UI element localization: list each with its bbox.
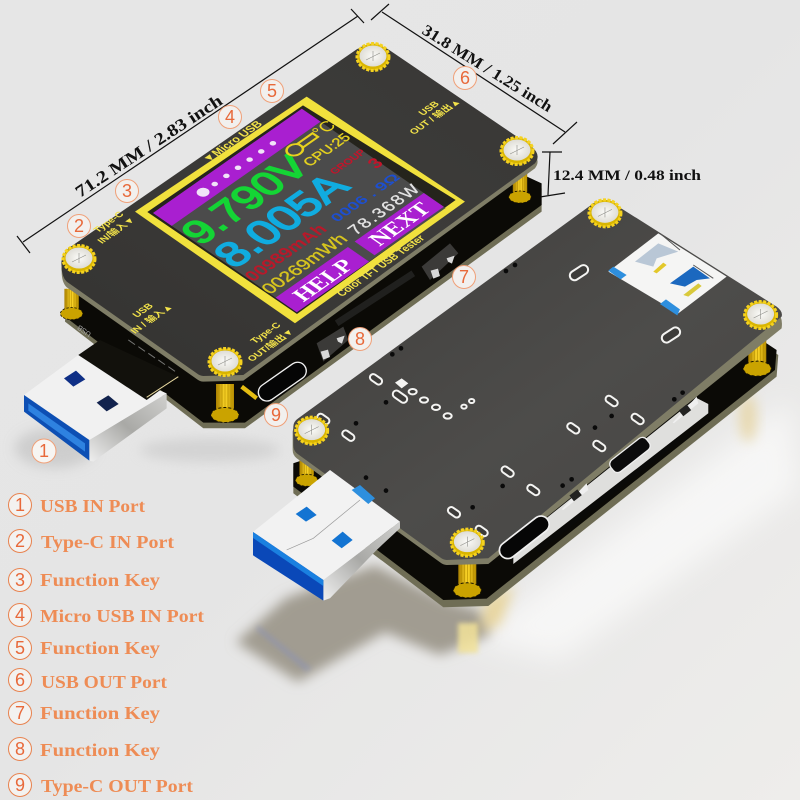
NEXT button: NEXT xyxy=(363,199,436,250)
micro USB label: ▼Micro USB xyxy=(201,119,266,165)
screen frame xyxy=(135,97,465,323)
card slot xyxy=(537,438,680,551)
USB IN sublabel: IN / 输入▲ xyxy=(128,302,176,336)
side port strip xyxy=(496,397,708,564)
CPU temperature: CPU:25 xyxy=(299,130,354,169)
brass pin xyxy=(242,387,257,398)
legend 9: Type-C OUT Port xyxy=(41,776,193,796)
legend 4: Micro USB IN Port xyxy=(40,606,204,626)
callout 6 xyxy=(454,66,476,90)
brass standoffs xyxy=(295,338,771,598)
USB OUT sublabel: OUT / 输出▲ xyxy=(407,97,464,137)
front device: comb traces xyxy=(128,340,175,371)
callout 1: 1 xyxy=(39,441,49,461)
dimension: height: 12.4 MM / 0.48 inch xyxy=(553,168,702,184)
callout 1 xyxy=(32,439,56,463)
type-C OUT port xyxy=(255,359,310,404)
vias xyxy=(354,263,685,510)
legend 6: 6 xyxy=(15,670,25,690)
temperature icon xyxy=(283,132,321,158)
callout 9: 9 xyxy=(271,405,281,425)
floor shadows xyxy=(15,394,800,682)
front device: display xyxy=(152,105,451,313)
group label: GROUP xyxy=(328,148,369,177)
HELP button: HELP xyxy=(287,255,359,305)
dimension: width xyxy=(371,4,577,144)
screws xyxy=(296,200,777,556)
callouts on the devices xyxy=(32,66,476,463)
side switch near xyxy=(562,483,588,510)
legend 7: 7 xyxy=(15,703,25,723)
brass reflection xyxy=(458,623,478,653)
dimension: length: 71.2 MM / 2.83 inch xyxy=(72,90,226,201)
board labels xyxy=(91,97,464,364)
legend 1 xyxy=(8,494,145,516)
USB plug xyxy=(253,470,400,601)
type-C OUT label: Type-C xyxy=(248,321,284,346)
USB OUT label: USB xyxy=(416,100,442,118)
side switch far xyxy=(673,397,698,423)
milliamp hours: 00989mAh xyxy=(240,221,331,284)
side switch upper xyxy=(422,243,458,280)
USB IN label: USB xyxy=(130,302,156,320)
front device: USB plug xyxy=(24,340,178,462)
callout 5 xyxy=(260,80,284,102)
callout 7: 7 xyxy=(459,267,469,287)
callout 8: 8 xyxy=(355,329,365,349)
power: 78.368W xyxy=(344,181,425,238)
group number: 3 xyxy=(363,155,388,172)
tester name: Color TFT USB Tester xyxy=(335,233,428,299)
callout 4 xyxy=(218,106,242,128)
legend 9: 9 xyxy=(15,775,25,795)
USB OUT opening xyxy=(608,233,727,315)
status dots xyxy=(194,139,280,199)
legend 8: Function Key xyxy=(40,740,160,760)
back device xyxy=(253,200,782,607)
dimension: length xyxy=(17,9,364,253)
front device: brass standoffs xyxy=(60,172,531,422)
front device: mirrored label: USB xyxy=(75,323,93,339)
legend 9 xyxy=(8,774,193,796)
legend xyxy=(8,494,204,796)
dimension: height xyxy=(540,152,702,197)
front device: lower board xyxy=(65,173,542,428)
callout 4: 4 xyxy=(225,107,235,127)
purple status band xyxy=(153,109,321,226)
front device: top board xyxy=(61,45,538,382)
type-C IN sublabel: IN/输入▼ xyxy=(95,215,138,246)
callout 9 xyxy=(264,404,288,426)
legend 2 xyxy=(8,530,174,552)
type-C OUT port xyxy=(496,513,553,562)
callout 2 xyxy=(68,214,90,238)
side switch upper caps xyxy=(431,256,455,279)
legend 7 xyxy=(8,702,160,724)
legend 6 xyxy=(8,668,167,692)
legend 3: 3 xyxy=(15,570,25,590)
milliwatt hours: 00269mWh xyxy=(257,231,352,297)
legend 5: 5 xyxy=(15,638,25,658)
top board edge xyxy=(293,206,782,565)
legend 7: Function Key xyxy=(40,703,160,723)
callout 8 xyxy=(348,328,372,350)
callout 7 xyxy=(452,266,476,288)
micro USB slot xyxy=(337,273,413,323)
current reading: 8.005A xyxy=(204,166,359,274)
legend 3 xyxy=(8,568,160,592)
legend 5 xyxy=(8,636,160,660)
callout 2: 2 xyxy=(74,216,84,236)
solder pads xyxy=(316,263,682,538)
callout 5: 5 xyxy=(267,81,277,101)
front device: side connectors xyxy=(242,243,458,404)
legend 4 xyxy=(8,604,204,626)
celsius: °C xyxy=(307,117,340,140)
voltage reading: 9.790V xyxy=(172,148,319,251)
callout 3 xyxy=(116,180,138,202)
type-C OUT sublabel: OUT/输出▼ xyxy=(245,327,297,364)
callout 6: 6 xyxy=(460,68,470,88)
side switch lower caps xyxy=(321,336,345,360)
legend 4: 4 xyxy=(15,605,25,625)
screen bezel xyxy=(147,105,456,314)
lower board xyxy=(293,300,778,607)
square pad xyxy=(395,378,408,388)
legend 2: 2 xyxy=(15,531,25,551)
side switch lower xyxy=(317,327,348,362)
NEXT button xyxy=(355,193,444,256)
resistance: 0006 . 9Ω xyxy=(327,171,403,224)
legend 5: Function Key xyxy=(40,638,160,658)
type-C IN label: Type-C xyxy=(91,210,127,235)
legend 6: USB OUT Port xyxy=(41,672,167,692)
HELP button xyxy=(276,247,369,313)
micro USB port xyxy=(608,435,652,475)
callout 3: 3 xyxy=(122,181,132,201)
top board face xyxy=(293,201,782,560)
legend 1: USB IN Port xyxy=(40,496,145,516)
front device: screws xyxy=(63,44,533,376)
legend 2: Type-C IN Port xyxy=(41,532,174,552)
legend 8 xyxy=(8,738,160,760)
legend 8: 8 xyxy=(15,739,25,759)
legend 1: 1 xyxy=(15,495,25,515)
legend 3: Function Key xyxy=(40,570,160,590)
back plug shadow xyxy=(236,565,490,682)
dimension: width: 31.8 MM / 1.25 inch xyxy=(419,22,555,116)
